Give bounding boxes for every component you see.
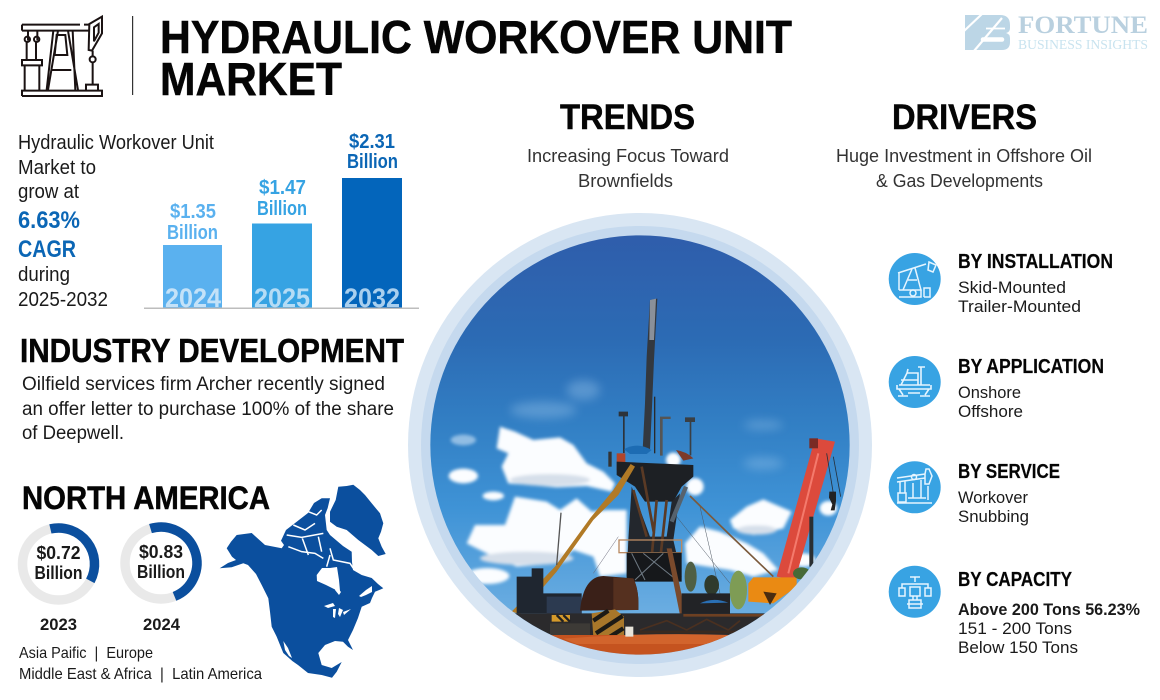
icon: offshore platform [889,356,941,408]
segment: by installation [889,251,1113,316]
regions list: Middle East & Africa | Latin America [19,666,262,683]
CAGR text block: grow at [18,181,79,203]
donut: 2023: 2023 [40,615,77,634]
bar 2025: Billion [257,198,307,220]
bar 2024: 2024 [165,283,221,313]
trees and ground equipment [510,562,810,660]
title: HYDRAULIC WORKOVER UNIT [160,11,792,63]
donut: 2023: $0.72 [36,543,80,563]
central photo: workover rig in circular frame [408,213,872,677]
donut: 2023: Billion [34,563,82,583]
bar 2024: Billion [167,222,218,244]
industry development text: an offer letter to purchase 100% of the share [22,399,394,420]
mainland [220,498,383,678]
icon: pump jack [889,253,941,305]
heading: drivers: DRIVERS [892,98,1037,137]
title [160,11,792,105]
bar 2025: $1.47 [259,177,306,199]
bar chart: market size [144,131,419,313]
segment: by capacity: BY CAPACITY [958,569,1073,591]
segment: by application: BY APPLICATION [958,356,1104,378]
segment: by capacity: 151 - 200 Tons [958,619,1072,638]
trends text: Increasing Focus Toward [527,146,729,166]
industry development text: Oilfield services firm Archer recently signed [22,374,385,395]
logo: Fortune Business Insights: BUSINESS INSIGHTS [1018,38,1148,53]
CAGR text block: 2025-2032 [18,289,108,311]
title: MARKET [160,53,342,105]
bar 2032 [342,131,402,313]
bar 2032: 2032 [344,283,400,313]
drivers text: & Gas Developments [876,171,1043,191]
segment: by service [889,461,1060,526]
trends text: Brownfields [578,171,673,191]
heading: trends: TRENDS [560,98,695,137]
donut: 2024: $0.83 [139,542,183,562]
segment: by application [889,356,1104,421]
segment: by installation: Skid-Mounted [958,278,1066,297]
bar 2025 [252,177,312,313]
regions list [19,645,262,683]
icon: workover rig [889,461,941,513]
regions list: Asia Paific | Europe [19,645,153,662]
segment: by installation: Trailer-Mounted [958,297,1081,316]
heading: industry development: INDUSTRY DEVELOPMENT [20,332,404,369]
segment: by service: Snubbing [958,507,1029,526]
segment: by application: Onshore [958,383,1021,402]
industry development text [22,374,394,444]
heading: north america: NORTH AMERICA [22,480,270,516]
logo: Fortune Business Insights [964,12,1148,53]
segment: by capacity: Above 200 Tons 56.23% [958,600,1140,619]
derrick [608,299,695,615]
segment: by installation: BY INSTALLATION [958,251,1113,273]
segment: by service: BY SERVICE [958,461,1060,483]
industry development text: of Deepwell. [22,423,124,444]
bar 2032: Billion [347,151,398,173]
segment: by capacity [889,566,1140,657]
Hudson Bay and inland water [283,567,372,658]
trends text [527,146,729,191]
segment: by capacity: Below 150 Tons [958,638,1078,657]
donut: 2024: Billion [137,562,185,582]
bar 2025: 2025 [254,283,310,313]
Arctic channels [287,510,353,568]
icon: wellhead [889,566,941,618]
bar 2024: $1.35 [170,201,216,223]
CAGR text block: 6.63% [18,207,80,234]
sky haze [510,380,783,469]
donut: 2024: 2024 [143,615,181,634]
Greenland [330,485,386,556]
CAGR text block: Hydraulic Workover Unit [18,132,214,154]
crane [748,438,841,605]
map: North America [220,485,386,678]
bar 2024 [163,201,222,313]
donut: 2024 [125,527,197,634]
header divider [132,16,133,95]
drivers text: Huge Investment in Offshore Oil [836,146,1092,166]
donut: 2023 [22,528,95,634]
CAGR text block [18,132,214,311]
bar 2032: $2.31 [349,131,395,153]
guy lines and braces [512,464,773,614]
CAGR text block: during [18,264,70,286]
logo: Fortune Business Insights: FORTUNE [1018,12,1148,39]
segment: by service: Workover [958,488,1028,507]
drivers text [836,146,1092,191]
CAGR text block: CAGR [18,236,76,263]
header icon: pump jack [22,17,102,96]
CAGR text block: Market to [18,157,96,179]
clouds [449,427,837,584]
segment: by application: Offshore [958,402,1023,421]
